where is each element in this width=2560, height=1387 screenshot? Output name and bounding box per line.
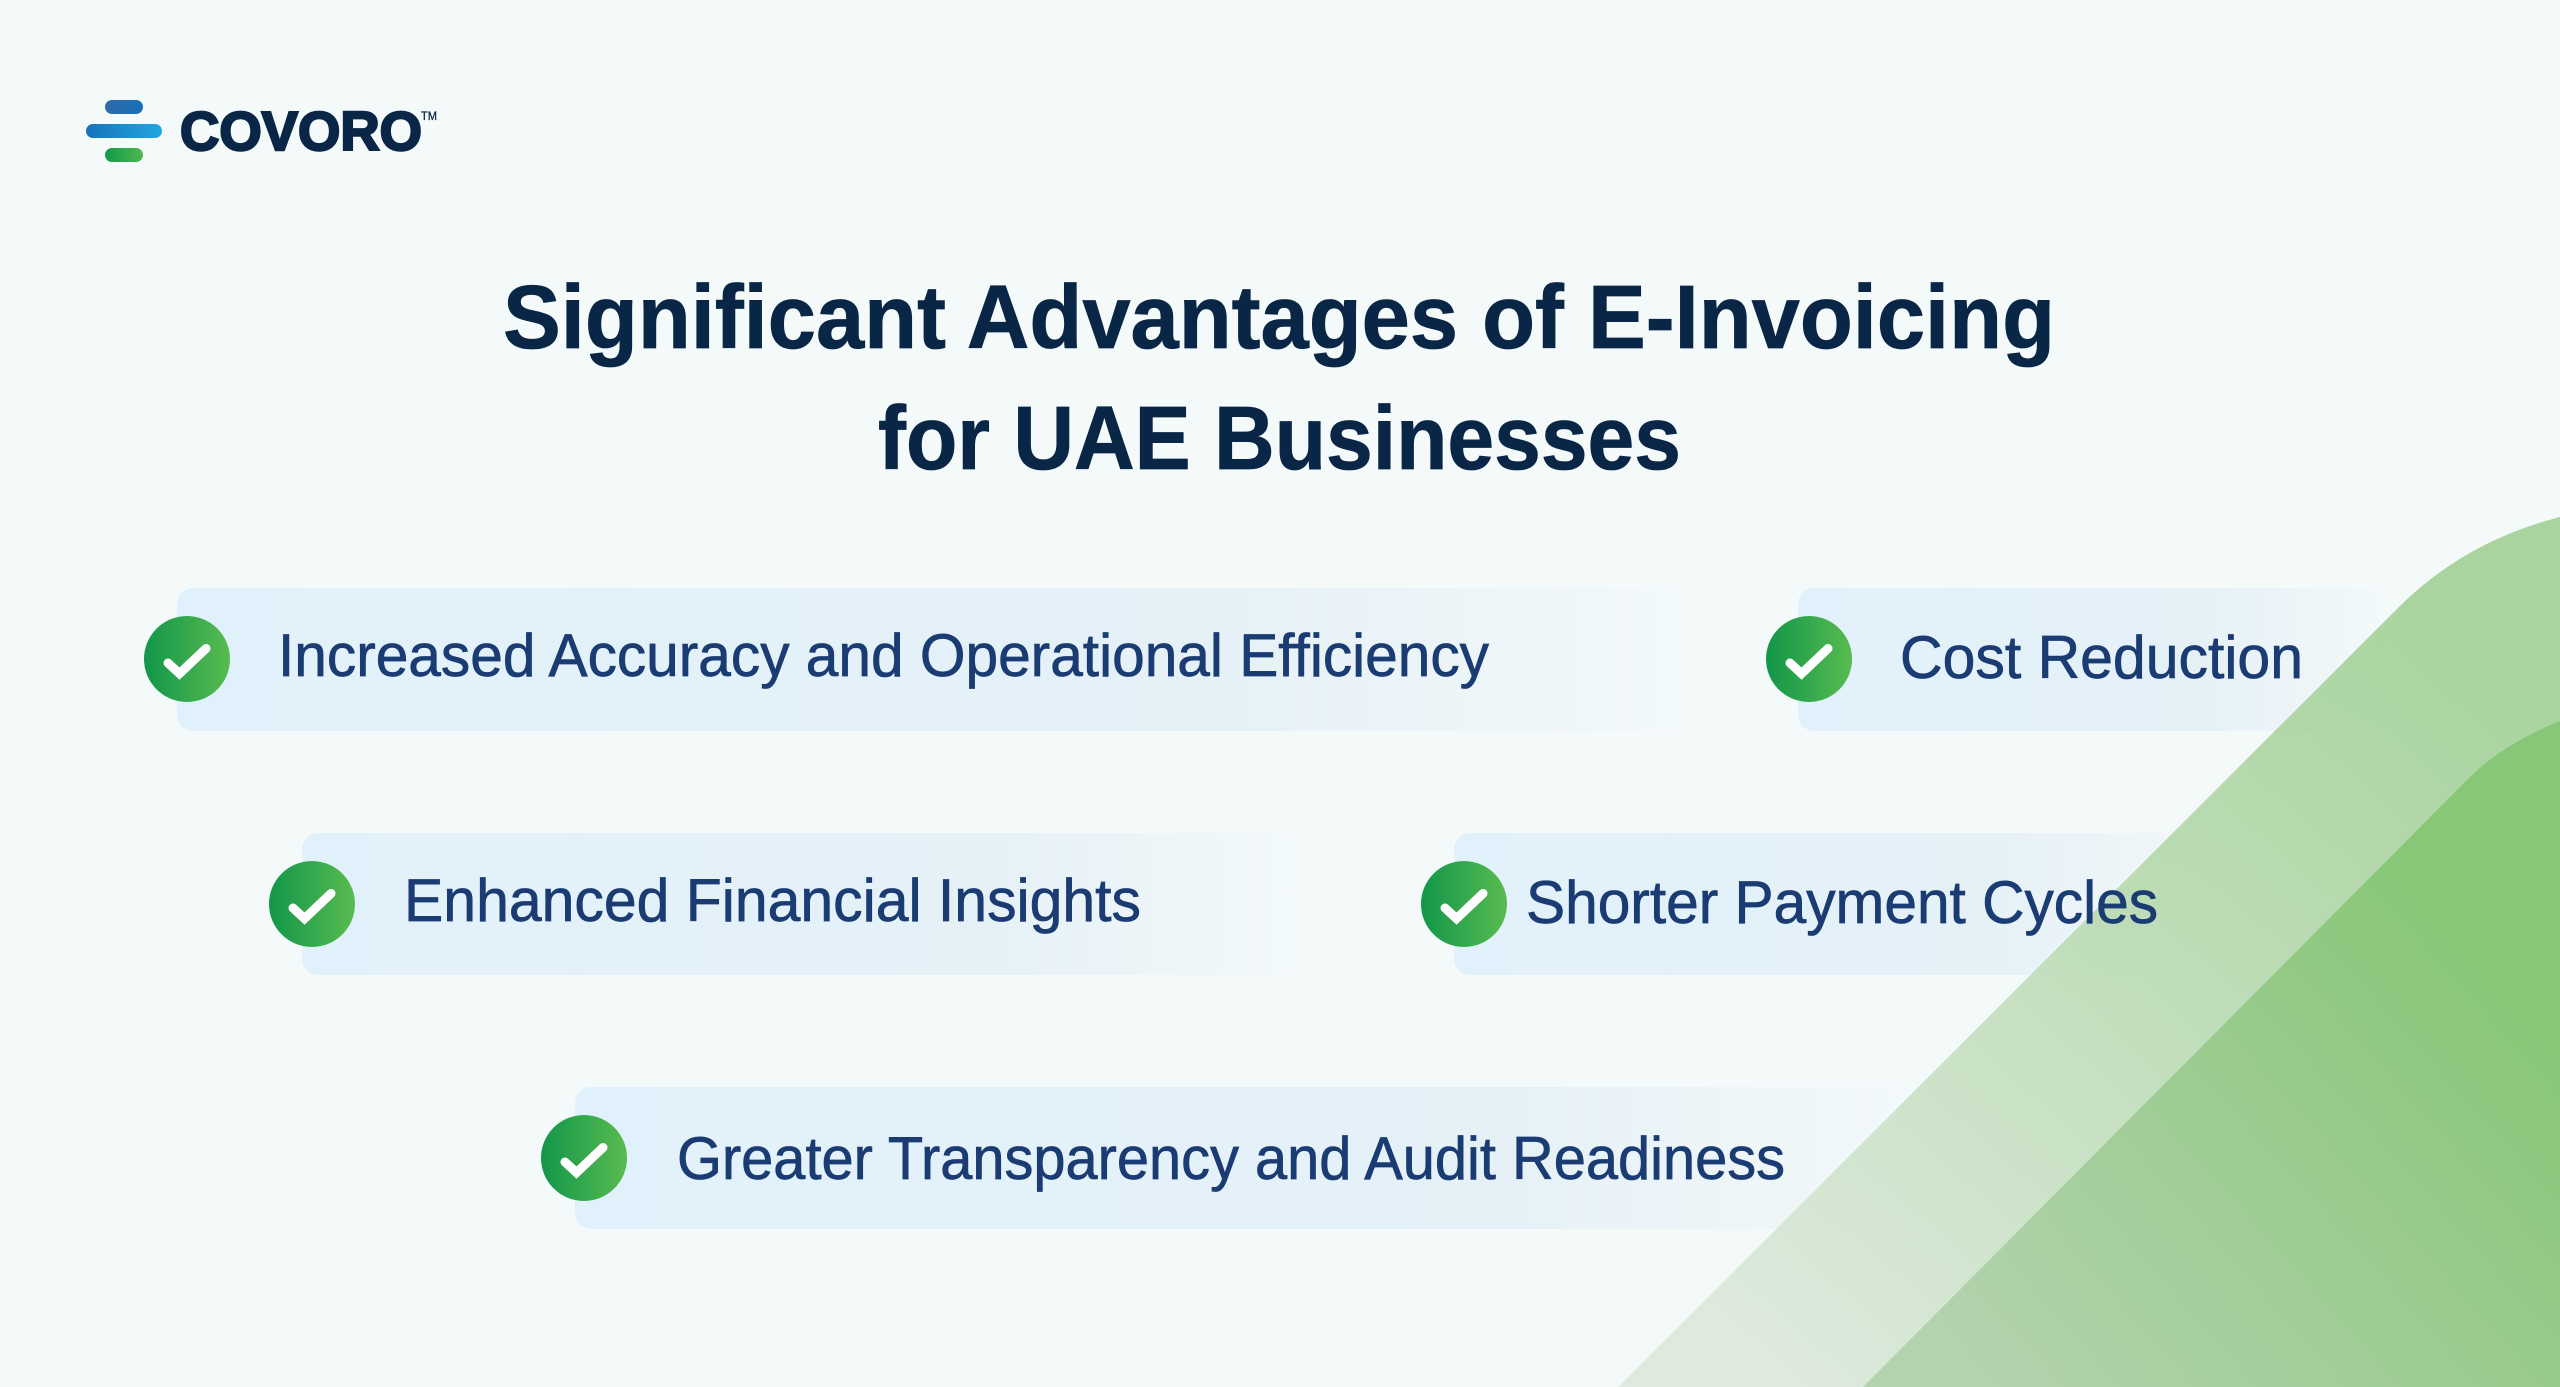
title (503, 268, 2055, 489)
icon: check (144, 616, 230, 702)
item: Enhanced Financial Insights (269, 861, 1141, 947)
title line 1: Significant Advantages of E-Invoicing (503, 268, 2055, 368)
icon: check (269, 861, 355, 947)
icon: check (541, 1115, 627, 1201)
label: Increased Accuracy and Operational Efficiency (278, 622, 1489, 689)
icon: check (1421, 861, 1507, 947)
panel: benefit pill backgrounds (177, 588, 2388, 1229)
item: Shorter Payment Cycles (1421, 861, 2158, 947)
trademark: TM (421, 111, 437, 123)
title line 2: for UAE Businesses (878, 389, 1681, 489)
label: Greater Transparency and Audit Readiness (677, 1125, 1785, 1192)
label: Enhanced Financial Insights (404, 867, 1141, 934)
decorative shape: light green wave (1618, 517, 2560, 1387)
icon: check (1766, 616, 1852, 702)
logo: Covoro (86, 100, 437, 162)
label: Shorter Payment Cycles (1526, 869, 2158, 936)
item: Greater Transparency and Audit Readiness (541, 1115, 1785, 1201)
label: Cost Reduction (1900, 624, 2303, 691)
item: Cost Reduction (1766, 616, 2303, 702)
item: Increased Accuracy and Operational Efficiency (144, 616, 1489, 702)
logo wordmark: COVORO (180, 100, 422, 162)
icon: logo bars (86, 100, 162, 162)
decorative shape: dark green wave (1863, 721, 2560, 1387)
